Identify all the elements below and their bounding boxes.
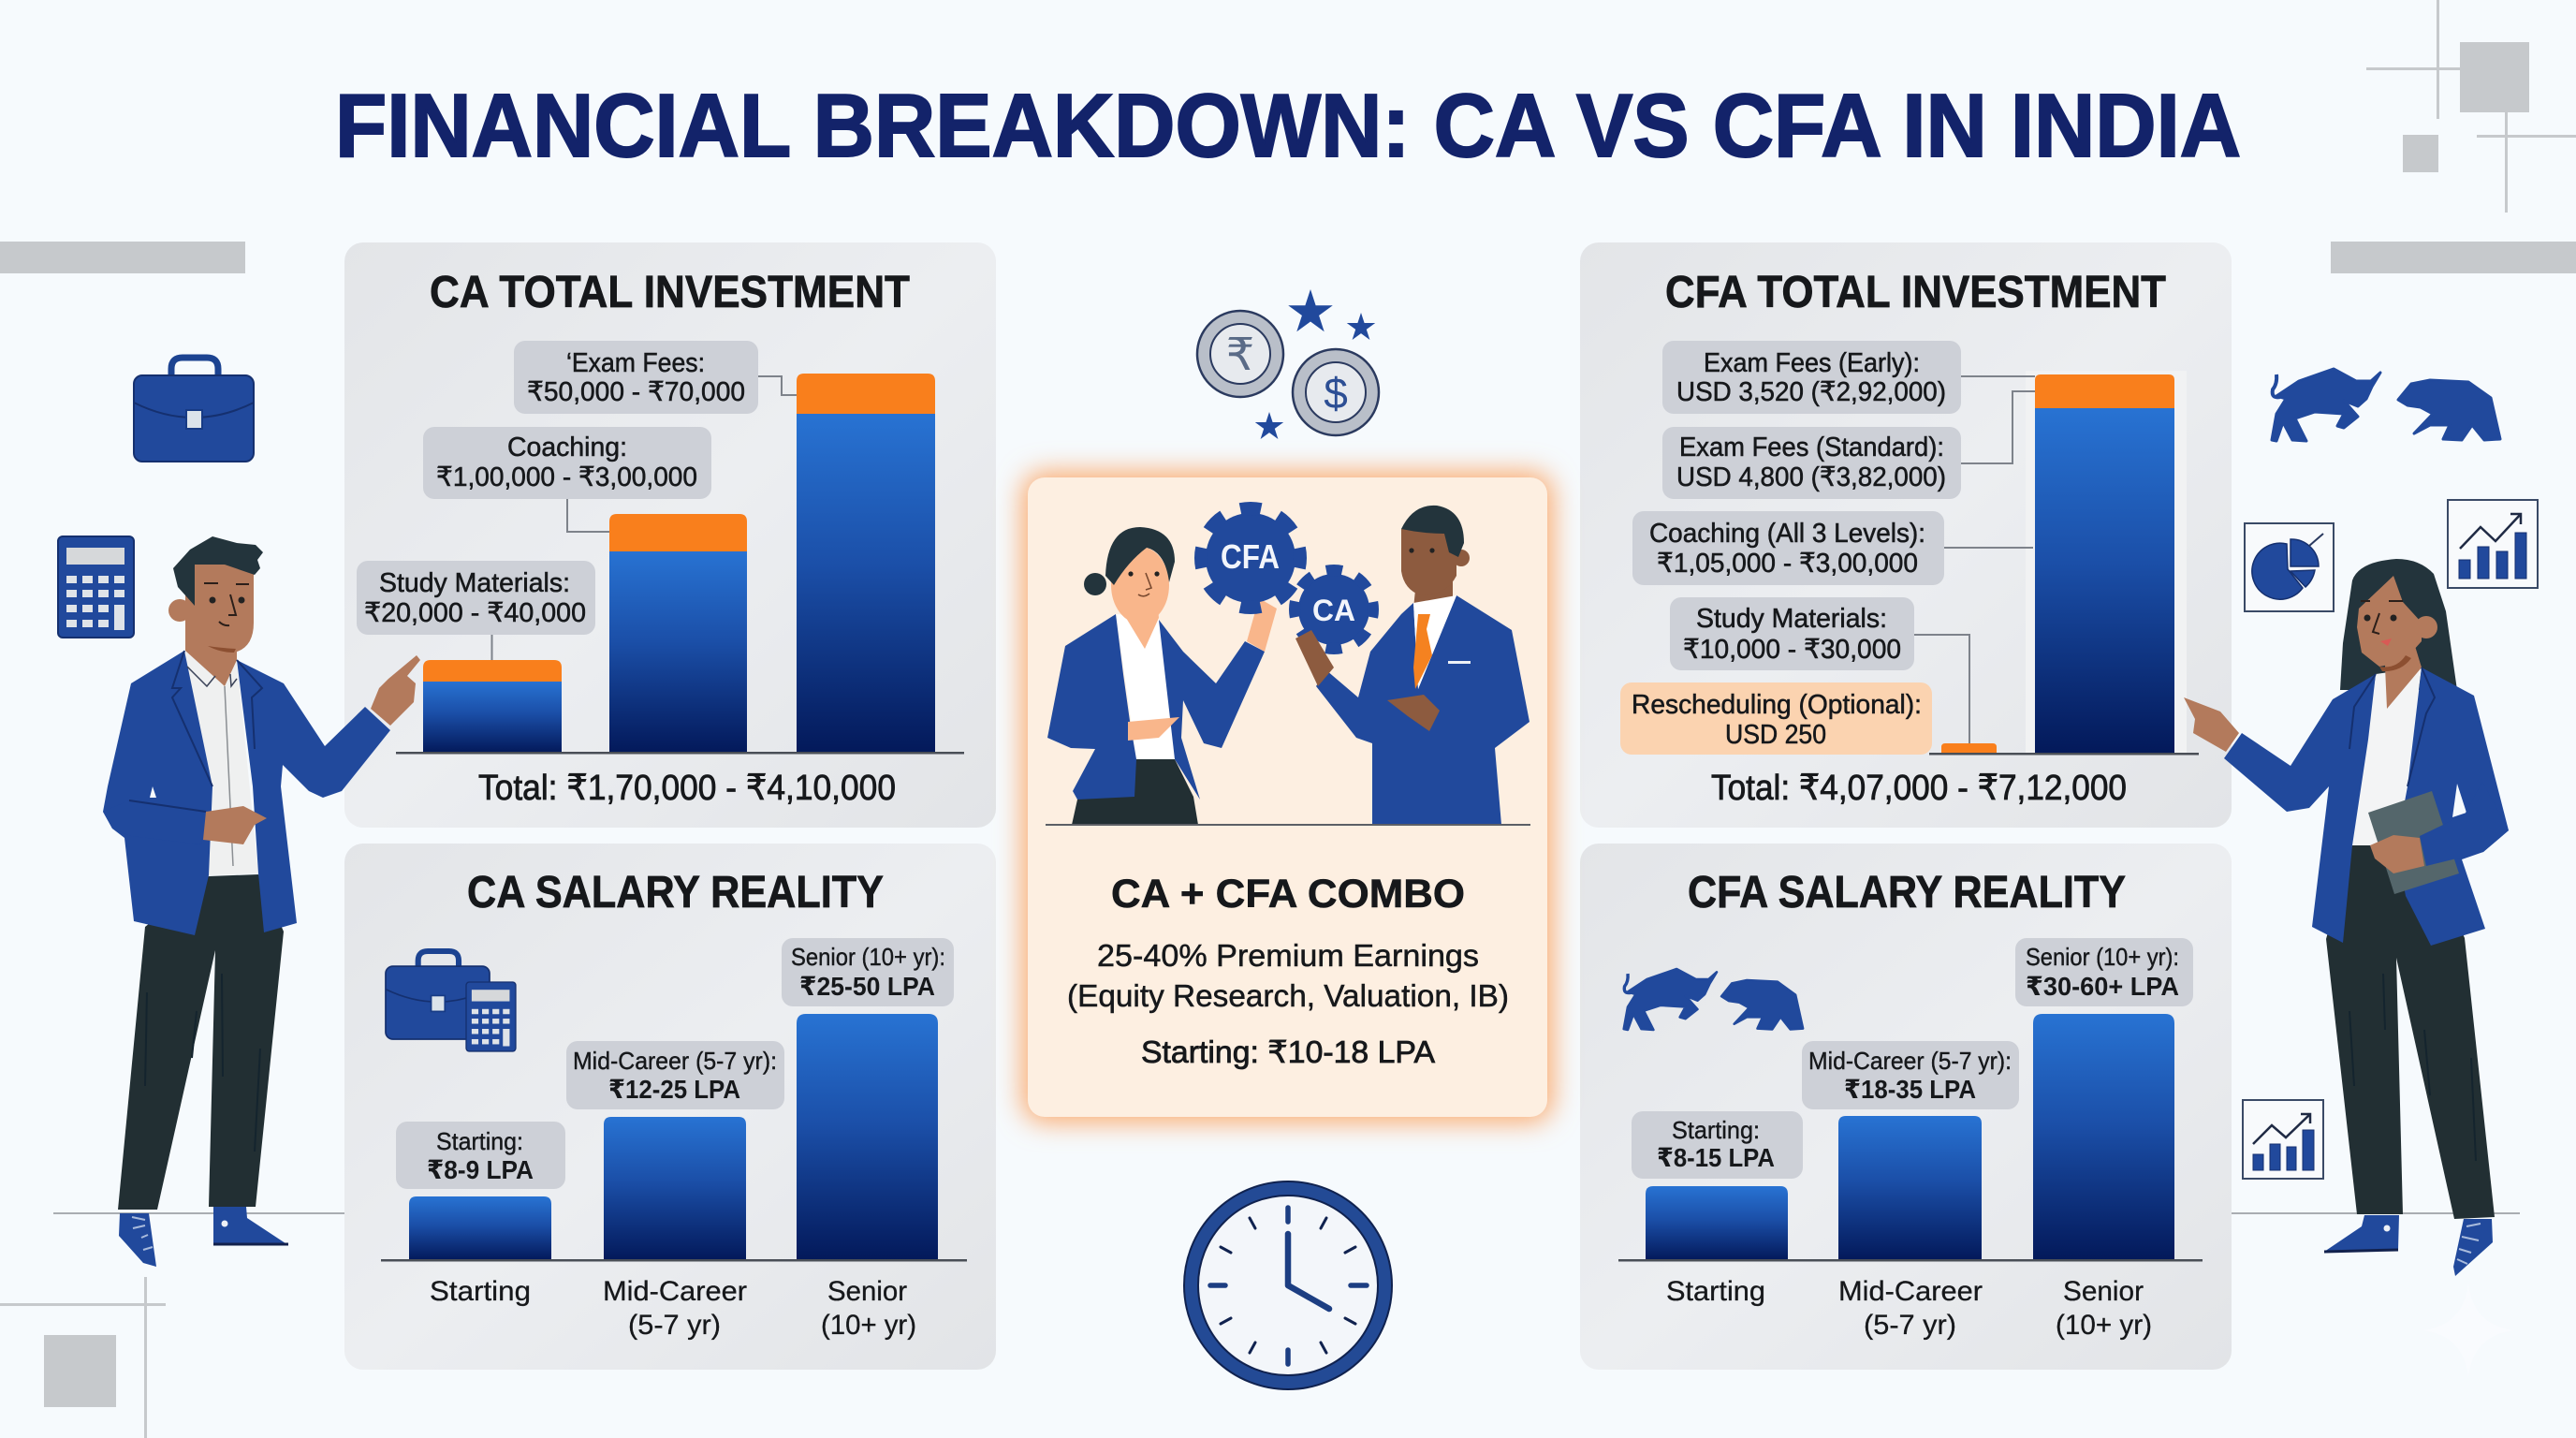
gear: CFA [1201, 508, 1300, 608]
icon: calculator [58, 536, 134, 638]
callout: exam fees early [1662, 341, 1961, 414]
callout: study materials: ₹20,000 - ₹40,000 [364, 598, 586, 628]
icon: briefcase [134, 358, 254, 462]
callout: senior salary: Senior (10+ yr): [2026, 943, 2179, 971]
axis labels: Mid-Career [603, 1276, 747, 1307]
callout: coaching: ₹1,05,000 - ₹3,00,000 [1657, 549, 1918, 579]
callout: mid-career salary: ₹12-25 LPA [608, 1075, 740, 1104]
total: CA investment: Total: ₹1,70,000 - ₹4,10,000 [478, 769, 896, 808]
axis labels: Starting [430, 1276, 531, 1307]
callout: starting salary: ₹8-9 LPA [427, 1155, 534, 1184]
callout: senior salary: ₹30-60+ LPA [2026, 972, 2179, 1001]
callout: mid-career salary: Mid-Career (5-7 yr): [1808, 1047, 2012, 1075]
callout: mid-career salary: Mid-Career (5-7 yr): [573, 1047, 777, 1075]
combo details: Starting: ₹10-18 LPA [1141, 1034, 1435, 1069]
woman [1072, 759, 1198, 825]
callout: senior salary: ₹25-50 LPA [799, 972, 935, 1001]
callout: coaching: Coaching: [507, 433, 627, 462]
callout: coaching: Coaching (All 3 Levels): [1649, 519, 1925, 549]
panel: CA total investment [344, 242, 996, 828]
heading: CFA salary reality: CFA SALARY REALITY [1688, 868, 2126, 917]
callout: study materials [1670, 597, 1914, 670]
axis labels [430, 1276, 916, 1341]
panel: CFA total investment [1580, 242, 2232, 828]
callout: starting salary [396, 1122, 565, 1189]
callout: starting salary: Starting: [1672, 1116, 1760, 1144]
bar chart: CA salary [381, 1014, 967, 1262]
callout: exam fees: ‘Exam Fees: [566, 348, 705, 378]
callout: coaching [423, 427, 711, 499]
icon: pie chart frame [2245, 523, 2334, 611]
panel: CA salary reality [344, 844, 996, 1370]
axis labels: Senior [2063, 1276, 2144, 1307]
icon: small bull and bear [1624, 969, 1803, 1030]
callout: exam fees early: USD 3,520 (₹2,92,000) [1676, 377, 1946, 407]
callout: senior salary [2015, 938, 2193, 1006]
axis labels: Starting [1666, 1276, 1765, 1307]
gear: CA: CA [1312, 594, 1355, 627]
axis labels: (5-7 yr) [628, 1310, 721, 1341]
axis labels: (10+ yr) [821, 1310, 916, 1341]
callout: mid-career salary: ₹18-35 LPA [1844, 1075, 1976, 1104]
icon: bull and bear [2272, 369, 2500, 441]
icon: coins and stars [1197, 289, 1379, 439]
heading: CA total investment: CA TOTAL INVESTMENT [430, 268, 910, 317]
combo details [1067, 938, 1509, 1069]
combo details: 25-40% Premium Earnings [1097, 938, 1479, 973]
axis labels: (5-7 yr) [1864, 1310, 1956, 1341]
icon: lower growth chart frame [2243, 1100, 2323, 1179]
axis labels: (10+ yr) [2056, 1310, 2152, 1341]
callout: senior salary [782, 938, 954, 1006]
callout: study materials: Study Materials: [1696, 604, 1887, 634]
combo details: (Equity Research, Valuation, IB) [1067, 978, 1509, 1013]
man [1376, 805, 1498, 825]
character: woman presenter [2184, 559, 2509, 1276]
axis labels: Senior [827, 1276, 907, 1307]
callout: starting salary: Starting: [436, 1127, 523, 1155]
callout: study materials [357, 561, 595, 635]
icon: coins and stars: ₹ [1226, 330, 1254, 380]
bar chart: CFA investment [1914, 371, 2199, 755]
total: CFA investment: Total: ₹4,07,000 - ₹7,12,000 [1711, 769, 2127, 808]
callout: rescheduling: USD 250 [1725, 720, 1826, 750]
callout: exam fees standard: Exam Fees (Standard): [1679, 433, 1944, 462]
callout: exam fees: ₹50,000 - ₹70,000 [527, 377, 745, 407]
character: man presenter [103, 536, 420, 1267]
callout: exam fees [514, 341, 758, 414]
callout: mid-career salary [566, 1041, 784, 1109]
icon: growth chart frame [2448, 500, 2538, 588]
icon: clock [1191, 1189, 1385, 1382]
callout: exam fees early: Exam Fees (Early): [1704, 348, 1920, 378]
callout: exam fees standard: USD 4,800 (₹3,82,000) [1676, 462, 1946, 492]
icon: briefcase and calculator [386, 951, 516, 1051]
illustration: woman and man joining gears [1046, 506, 1530, 826]
callout: starting salary [1632, 1111, 1803, 1179]
bar chart: CA investment [396, 374, 964, 755]
callout: mid-career salary [1802, 1041, 2019, 1109]
heading: CA + CFA combo: CA + CFA COMBO [1111, 872, 1465, 917]
gear: CFA: CFA [1221, 537, 1280, 576]
callout: study materials: ₹10,000 - ₹30,000 [1683, 635, 1901, 665]
callout: study materials: Study Materials: [379, 568, 570, 598]
bar chart: CFA salary [1618, 1014, 2203, 1262]
title: FINANCIAL BREAKDOWN: CA VS CFA IN INDIA [335, 76, 2241, 176]
callout: rescheduling [1620, 682, 1932, 755]
axis labels [1666, 1276, 2152, 1341]
callout: coaching: ₹1,00,000 - ₹3,00,000 [436, 462, 697, 492]
callout: rescheduling: Rescheduling (Optional): [1632, 690, 1922, 720]
panel: CA + CFA combo [1022, 472, 1553, 1123]
panel: CFA salary reality [1580, 844, 2232, 1370]
heading: CFA total investment: CFA TOTAL INVESTMENT [1665, 268, 2166, 317]
axis labels: Mid-Career [1838, 1276, 1983, 1307]
icon: coins and stars: $ [1324, 369, 1348, 418]
heading: CA salary reality: CA SALARY REALITY [467, 868, 884, 917]
callout: exam fees standard [1662, 427, 1961, 499]
callout: senior salary: Senior (10+ yr): [791, 943, 945, 971]
callout: coaching [1632, 511, 1944, 585]
gear: CA [1295, 570, 1373, 649]
callout: starting salary: ₹8-15 LPA [1657, 1143, 1775, 1172]
